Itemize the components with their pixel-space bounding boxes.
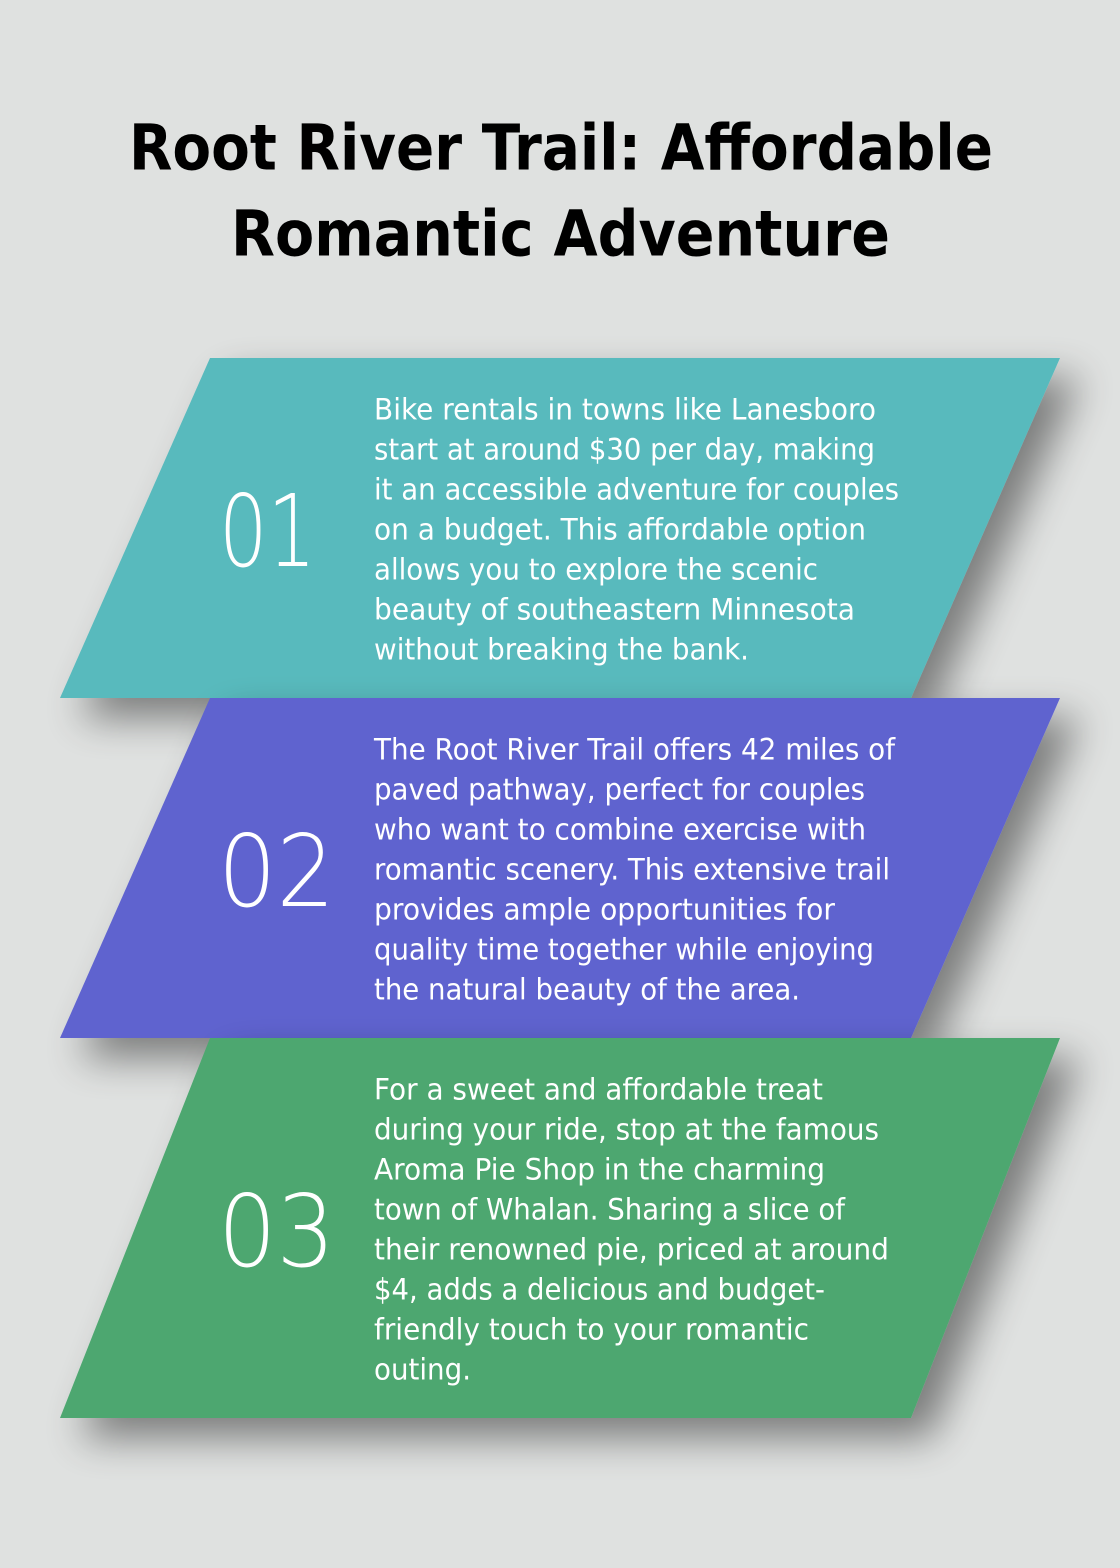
title: Romantic Adventure — [231, 198, 890, 270]
panel 3 text: friendly touch to your romantic — [374, 1312, 809, 1346]
panel 1 text: without breaking the bank. — [374, 632, 749, 666]
title: Root River Trail: Affordable — [129, 112, 993, 184]
panel 1 text: on a budget. This affordable option — [374, 512, 866, 546]
panel 3 text: their renowned pie, priced at around — [374, 1232, 889, 1266]
panel 2 text: The Root River Trail offers 42 miles of — [373, 732, 896, 766]
panel 1 text — [374, 392, 899, 666]
title — [129, 112, 993, 270]
panel 1 text: it an accessible adventure for couples — [374, 472, 899, 506]
step number 02: 02 — [218, 813, 335, 930]
panel 1 text: start at around $30 per day, making — [374, 432, 875, 466]
panel 2 text: provides ample opportunities for — [374, 892, 836, 926]
panel 1 text: allows you to explore the scenic — [374, 552, 818, 586]
panel 2 text: quality time together while enjoying — [374, 932, 874, 966]
panel 3 text: For a sweet and affordable treat — [374, 1072, 823, 1106]
panel 2 text — [373, 732, 896, 1006]
panel 3 text: $4, adds a delicious and budget- — [374, 1272, 825, 1306]
step number 03: 03 — [218, 1173, 335, 1290]
panel 2 text: who want to combine exercise with — [374, 812, 866, 846]
step number 01: 01 — [219, 473, 316, 590]
panel 1 text: Bike rentals in towns like Lanesboro — [374, 392, 876, 426]
panel 2 text: the natural beauty of the area. — [374, 972, 800, 1006]
panel 3 text: Aroma Pie Shop in the charming — [374, 1152, 825, 1186]
panel 3 text — [374, 1072, 889, 1386]
panel 3 text: town of Whalan. Sharing a slice of — [374, 1192, 846, 1226]
panel 2 text: romantic scenery. This extensive trail — [374, 852, 890, 886]
panel 3 shape: green parallelogram — [60, 1038, 1060, 1418]
panel 1 text: beauty of southeastern Minnesota — [374, 592, 855, 626]
panel 3 text: during your ride, stop at the famous — [374, 1112, 879, 1146]
panel 2 text: paved pathway, perfect for couples — [374, 772, 865, 806]
panel 1 shape: teal parallelogram — [60, 358, 1060, 698]
panel 3 text: outing. — [374, 1352, 471, 1386]
panel 2 shape: indigo parallelogram — [60, 698, 1060, 1038]
